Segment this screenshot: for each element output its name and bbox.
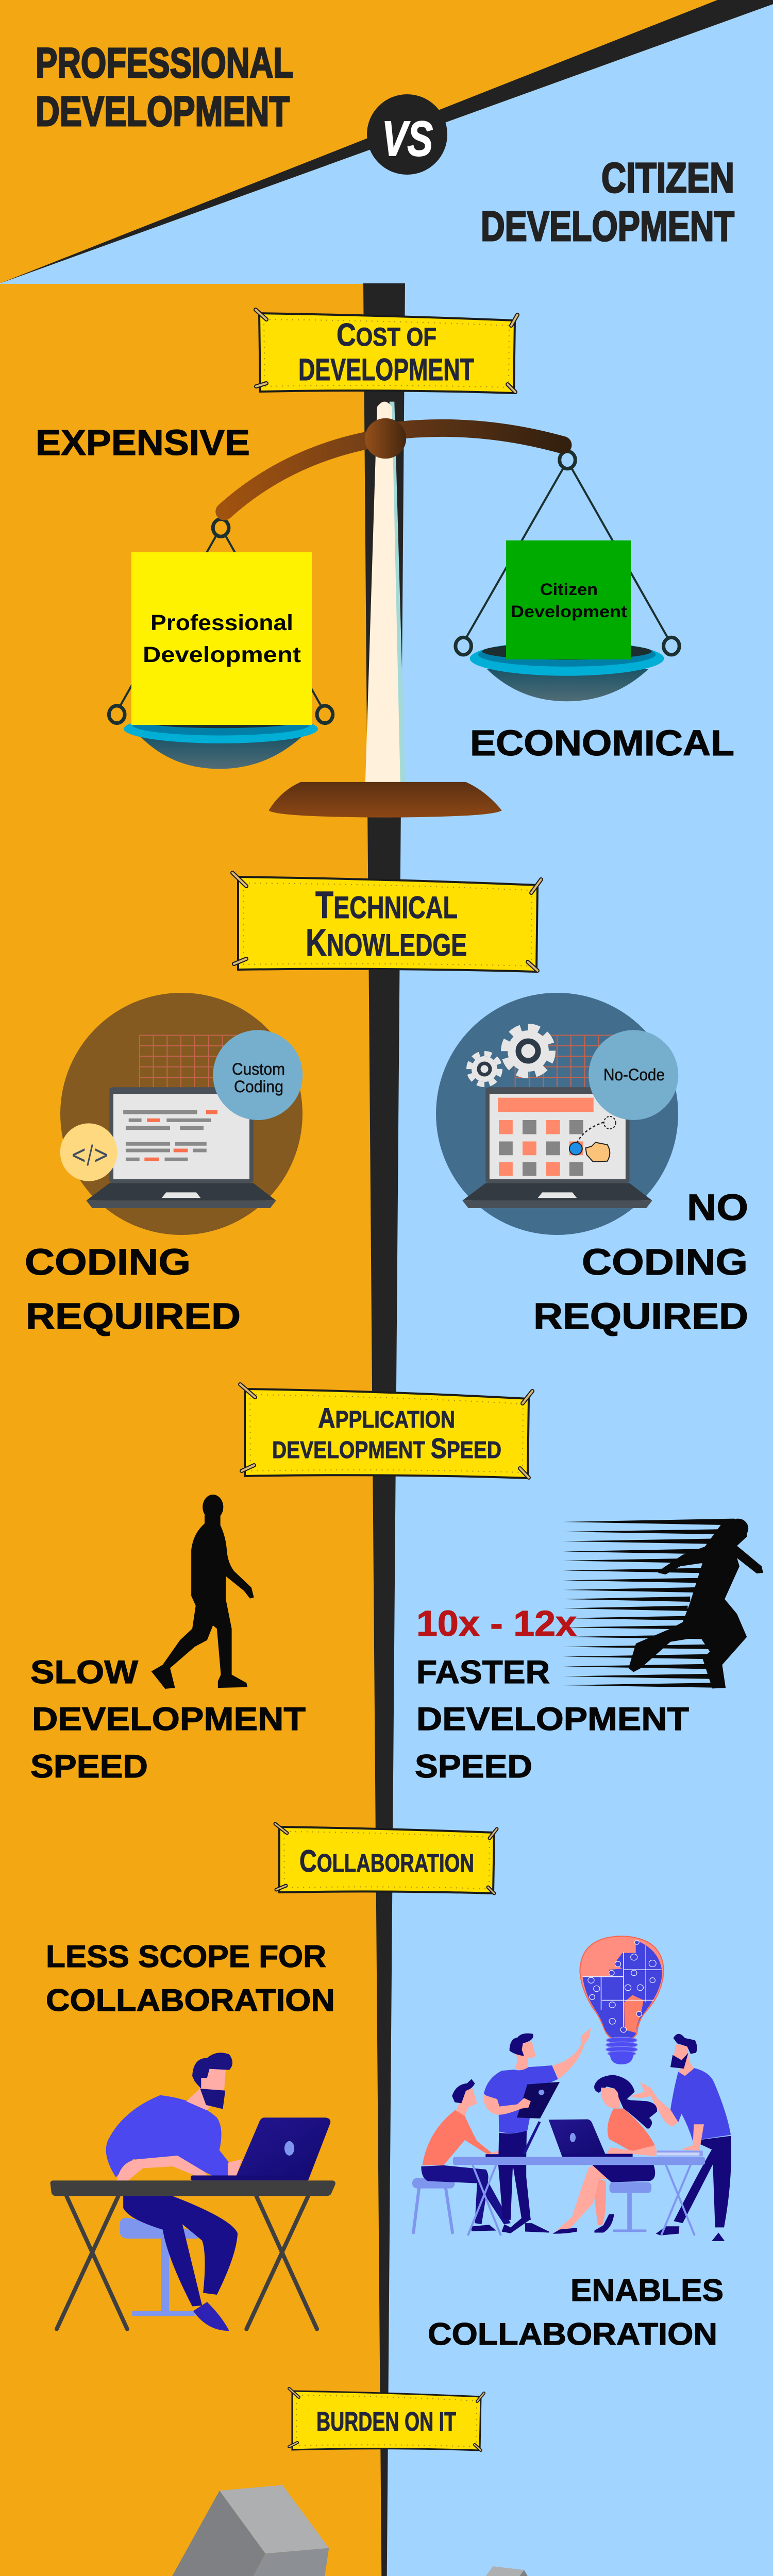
label: slow development speed: SLOW: [30, 1654, 139, 1690]
laptops: [485, 2120, 606, 2157]
code tag bubble: [60, 1123, 117, 1181]
code tag glyph: </>: [71, 1140, 109, 1170]
table: [453, 2157, 705, 2235]
icon: walking person silhouette: [152, 1495, 254, 1689]
label: 10x-12x faster development speed: DEVELOPMENT: [416, 1701, 689, 1737]
label: expensive: EXPENSIVE: [36, 422, 250, 463]
box: professional development: Professional: [150, 611, 293, 635]
label: economical: ECONOMICAL: [470, 723, 734, 763]
badge: versus: VS: [382, 111, 433, 166]
laptop: [191, 2117, 330, 2180]
desk top: [51, 2180, 335, 2196]
label: less scope for collaboration: COLLABORATION: [46, 1983, 335, 2018]
wireframe grid: [515, 1035, 614, 1087]
label: no coding required: CODING: [582, 1242, 748, 1283]
label: enables collaboration: ENABLES: [570, 2273, 724, 2308]
torso: [106, 2095, 232, 2177]
puzzle light bulb: [580, 1936, 664, 2064]
laptop: [462, 1087, 652, 1208]
illustration: person carrying heavy block: [166, 2485, 329, 2576]
no-code bubble: [589, 1030, 678, 1120]
label: enables collaboration: COLLABORATION: [428, 2317, 717, 2351]
banner: technical knowledge: TECHNICAL: [315, 884, 458, 926]
scale base: [268, 782, 502, 818]
banner: collaboration: [275, 1824, 497, 1893]
label: less scope for collaboration: [46, 1939, 335, 2018]
illustration: custom coding laptop: [60, 993, 303, 1235]
illustration: balance scale: [109, 402, 679, 818]
box: citizen development: Development: [511, 602, 627, 621]
label: 10x-12x faster development speed: FASTER: [416, 1654, 550, 1690]
box: professional development: [131, 552, 312, 725]
desk legs: [57, 2196, 317, 2329]
title: professional development: [36, 40, 293, 135]
label: enables collaboration: [428, 2273, 724, 2351]
custom coding bubble: [213, 1030, 303, 1120]
title: citizen development: [481, 155, 734, 250]
title: citizen development: CITIZEN: [601, 155, 734, 201]
head: [187, 2053, 232, 2110]
scale pivot knob: [365, 418, 406, 459]
seated man: [421, 2079, 511, 2231]
code lines: [123, 1110, 217, 1161]
stool: [120, 2218, 207, 2316]
title: professional development: PROFESSIONAL: [36, 40, 293, 87]
banner: burden on it: BURDEN ON IT: [316, 2407, 456, 2437]
illustration: no-code laptop: [436, 993, 678, 1235]
icon: running person with speed lines: [563, 1519, 763, 1688]
label: slow development speed: [30, 1654, 306, 1785]
banner: application development speed: DEVELOPMENT SPEED: [272, 1432, 501, 1464]
custom coding text: Custom: [232, 1060, 285, 1078]
illustration: team collaborating around puzzle light bulb: [412, 1936, 731, 2241]
banner: cost of development: COST OF: [337, 317, 436, 353]
custom coding text: Coding: [234, 1077, 283, 1096]
left bowl: [124, 715, 318, 769]
standing man with tablet: [484, 2028, 591, 2233]
wireframe grid: [140, 1035, 237, 1087]
banner: application development speed: APPLICATION: [318, 1402, 455, 1434]
label: 10x-12x faster development speed: [415, 1603, 689, 1785]
no-code text: No-Code: [603, 1065, 665, 1084]
banner: application development speed: [240, 1384, 532, 1478]
label: no coding required: REQUIRED: [533, 1296, 748, 1337]
title: professional development: DEVELOPMENT: [36, 88, 290, 135]
seated woman: [552, 2075, 657, 2234]
illustration: solo developer at desk: [51, 2053, 335, 2331]
label: coding required: [25, 1242, 241, 1337]
illustration: person carrying small block: [451, 2566, 553, 2576]
label: 10x-12x faster development speed: SPEED: [415, 1749, 532, 1785]
label: less scope for collaboration: LESS SCOPE FOR: [46, 1939, 326, 1974]
box: professional development: Development: [143, 642, 301, 667]
label: coding required: CODING: [25, 1242, 191, 1283]
arm and hand: [117, 2156, 207, 2180]
small block: [470, 2566, 553, 2576]
large block: [166, 2485, 329, 2576]
label: 10x-12x faster development speed: 10x - 12x: [416, 1603, 577, 1643]
banner: burden on it: [289, 2388, 484, 2450]
box: citizen development: Citizen: [540, 580, 598, 599]
label: coding required: REQUIRED: [26, 1296, 241, 1337]
banner: technical knowledge: KNOWLEDGE: [306, 921, 467, 964]
custom coding text: [232, 1060, 285, 1096]
app builder screen: [498, 1098, 616, 1176]
standing man with beard: [630, 2034, 731, 2241]
label: slow development speed: SPEED: [30, 1749, 148, 1785]
scale pole: [365, 402, 405, 783]
badge: versus: [367, 94, 447, 175]
laptop: [86, 1087, 276, 1208]
stool and table legs: [412, 2178, 651, 2233]
icon: gears: [469, 1027, 552, 1084]
scale strings and rings: [109, 451, 679, 723]
banner: collaboration: COLLABORATION: [299, 1844, 474, 1878]
label: no coding required: [533, 1188, 748, 1337]
banner: cost of development: DEVELOPMENT: [298, 352, 474, 387]
scale beam: [224, 428, 563, 512]
label: no coding required: NO: [687, 1188, 748, 1228]
right bowl: [470, 641, 664, 701]
legs: [123, 2194, 238, 2306]
banner: technical knowledge: [232, 873, 541, 972]
label: slow development speed: DEVELOPMENT: [32, 1701, 306, 1737]
banner: cost of development: [256, 310, 517, 393]
box: citizen development: [506, 540, 631, 659]
